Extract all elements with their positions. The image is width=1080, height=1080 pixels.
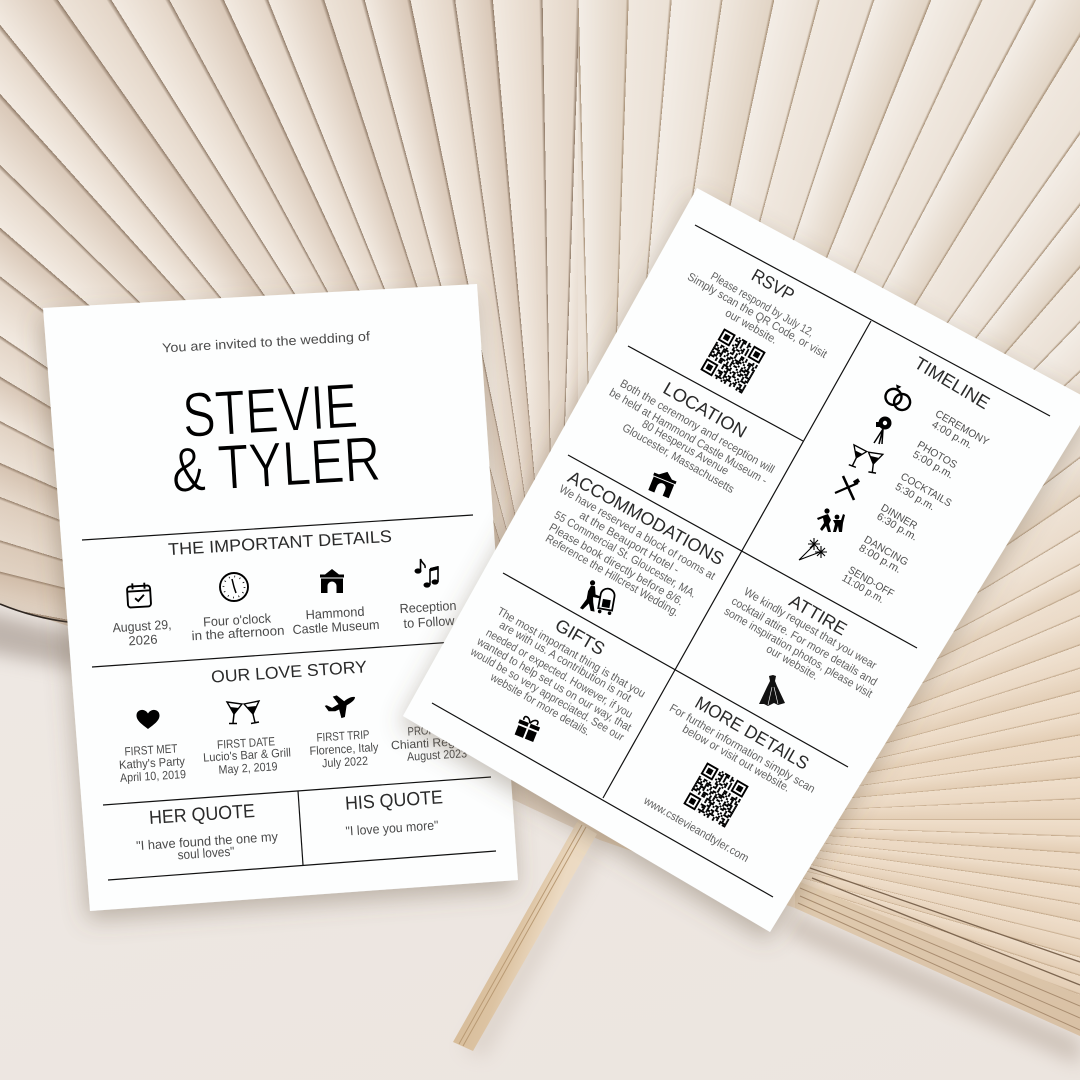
icon: dress <box>759 675 785 706</box>
icon: sparklers <box>799 538 827 560</box>
gifts section: are with us. A contribution is not <box>497 619 634 705</box>
icon: cocktail glasses <box>227 701 259 724</box>
his quote: HIS QUOTE <box>344 787 444 815</box>
icon: clock <box>220 573 248 601</box>
attire section: ATTIRE <box>786 591 850 639</box>
love story labels: FIRST MET <box>124 741 178 759</box>
website address: www.cstevieandtyler.com <box>641 795 751 865</box>
fan: left half of palm leaf <box>0 0 578 828</box>
icon: castle museum <box>320 569 344 593</box>
gifts section: needed or expected. However, if you <box>484 627 634 721</box>
accommodations section: at the Beauport Hotel - <box>577 510 681 577</box>
rsvp section: RSVP <box>748 265 798 305</box>
more details section: For further information simply scan <box>667 702 817 796</box>
icon: heart <box>136 710 160 729</box>
timeline labels: 8:00 p.m. <box>857 542 903 576</box>
gifts section: website for more details. <box>487 671 592 738</box>
timeline labels <box>840 408 991 606</box>
important details labels: August 29, <box>112 617 172 635</box>
accommodations section <box>543 467 727 619</box>
love story labels: July 2022 <box>322 754 369 770</box>
accommodations section: 55 Commercial St. Gloucester, MA. <box>552 509 698 601</box>
timeline labels: COCKTAILS <box>898 471 954 509</box>
floor shadow under fan <box>790 912 1080 1065</box>
icon: bellhop with luggage cart <box>580 579 617 615</box>
important details labels: Castle Museum <box>292 617 380 637</box>
her quote: soul loves" <box>177 844 235 862</box>
title: couple names: STEVIE <box>181 371 359 451</box>
QR code: more details <box>682 761 750 829</box>
attire section: cocktail attire. For more details and <box>729 595 879 689</box>
timeline labels: DANCING <box>862 534 910 568</box>
gifts section: The most important thing is that you <box>495 606 647 700</box>
important details labels: to Follow <box>403 613 455 631</box>
her quote: "I have found the one my <box>136 829 279 853</box>
divider lines and quote box <box>82 515 496 880</box>
icon: calendar <box>127 582 151 608</box>
timeline labels: 6:30 p.m. <box>875 511 919 543</box>
important details labels: 2026 <box>128 632 158 648</box>
her quote: HER QUOTE <box>148 801 256 829</box>
timeline labels: SEND-OFF <box>846 564 896 600</box>
panel: invitation front card <box>43 284 518 911</box>
love story labels: Kathy's Party <box>119 754 185 772</box>
love story labels: Florence, Italy <box>309 740 379 758</box>
icon: cocktail glasses <box>847 444 883 474</box>
rsvp section: Please respond by July 12, <box>708 271 816 339</box>
floor shadow under left fan edge <box>0 610 80 670</box>
grid lines <box>432 225 1050 897</box>
love story labels: Chianti Region <box>391 734 471 752</box>
timeline labels: DINNER <box>879 502 920 532</box>
her quote <box>136 801 279 862</box>
love story labels: May 2, 2019 <box>218 759 278 777</box>
icon: castle <box>647 467 679 499</box>
love story labels <box>119 721 471 785</box>
his quote <box>344 787 444 839</box>
important details labels <box>112 598 457 648</box>
timeline labels: 5:30 p.m. <box>893 481 937 513</box>
gifts section: GIFTS <box>552 615 608 659</box>
love story labels: August 2023 <box>407 746 468 764</box>
location section: Gloucester, Massachusetts <box>620 422 736 496</box>
icon: dancers <box>817 508 845 532</box>
location section: LOCATION <box>660 378 750 442</box>
heading: our love story: OUR LOVE STORY <box>211 657 367 687</box>
rsvp section: our website. <box>723 307 779 347</box>
icon: camera on tripod <box>874 416 892 444</box>
location section: 80 Hesperus Avenue <box>640 418 730 478</box>
title: couple names <box>170 371 382 506</box>
accommodations section: Please book directly before 8/6. <box>547 522 685 608</box>
location section: be held at Hammond Castle Museum - <box>607 387 769 487</box>
gifts section: wanted to help set us on our way, that <box>474 635 634 735</box>
timeline heading: TIMELINE <box>911 353 993 413</box>
attire section: We kindly request that you wear <box>742 586 879 672</box>
love story labels: FIRST TRIP <box>316 727 370 745</box>
fan stick <box>453 822 610 1058</box>
rsvp section: Simply scan the QR Code, or visit <box>685 271 829 361</box>
timeline labels: CEREMONY <box>933 408 991 448</box>
more details section: MORE DETAILS <box>692 692 812 774</box>
accommodations section: ACCOMMODATIONS <box>565 467 727 569</box>
fan: right half of palm leaf <box>578 0 1080 1035</box>
invitation line: You are invited to the wedding of <box>162 329 371 355</box>
timeline labels: 11:00 p.m. <box>840 572 886 606</box>
fan folded edge stack <box>795 868 1080 1036</box>
panel: details card <box>403 188 1080 932</box>
icon: wedding rings <box>882 383 915 413</box>
important details labels: Reception <box>399 598 457 616</box>
QR code: rsvp <box>699 327 767 395</box>
love story labels: PROPOSAL <box>407 721 461 739</box>
important details labels: Hammond <box>305 604 365 622</box>
important details labels: in the afternoon <box>191 623 285 643</box>
location section: Both the ceremony and reception will <box>618 378 776 476</box>
more details section: below or visit out website. <box>680 723 792 795</box>
attire section: our website. <box>764 643 820 683</box>
gifts section: would be so very appreciated. See our <box>467 646 626 744</box>
accommodations section: We have reserved a block of rooms at <box>557 483 718 583</box>
love story labels: FIRST DATE <box>217 734 275 752</box>
title: couple names: & TYLER <box>170 424 382 506</box>
timeline labels: PHOTOS <box>915 439 959 471</box>
icon: knife and fork <box>835 476 859 500</box>
accommodations section: Reference the Hillcrest Wedding. <box>543 533 681 619</box>
icon: airplane <box>323 690 360 722</box>
important details labels: Four o'clock <box>203 610 272 630</box>
icon: gift box <box>514 715 542 742</box>
timeline labels: 5:00 p.m. <box>911 449 955 481</box>
icon: music notes <box>414 559 438 588</box>
timeline labels: 4:00 p.m. <box>930 419 974 451</box>
heading: the important details: THE IMPORTANT DETAILS <box>168 527 392 559</box>
love story labels: Lucio's Bar & Grill <box>203 745 291 765</box>
fan left edge lip <box>0 604 68 622</box>
love story labels: April 10, 2019 <box>120 767 187 785</box>
his quote: "I love you more" <box>345 817 439 839</box>
attire section: some inspiration photos, please visit <box>722 606 875 701</box>
